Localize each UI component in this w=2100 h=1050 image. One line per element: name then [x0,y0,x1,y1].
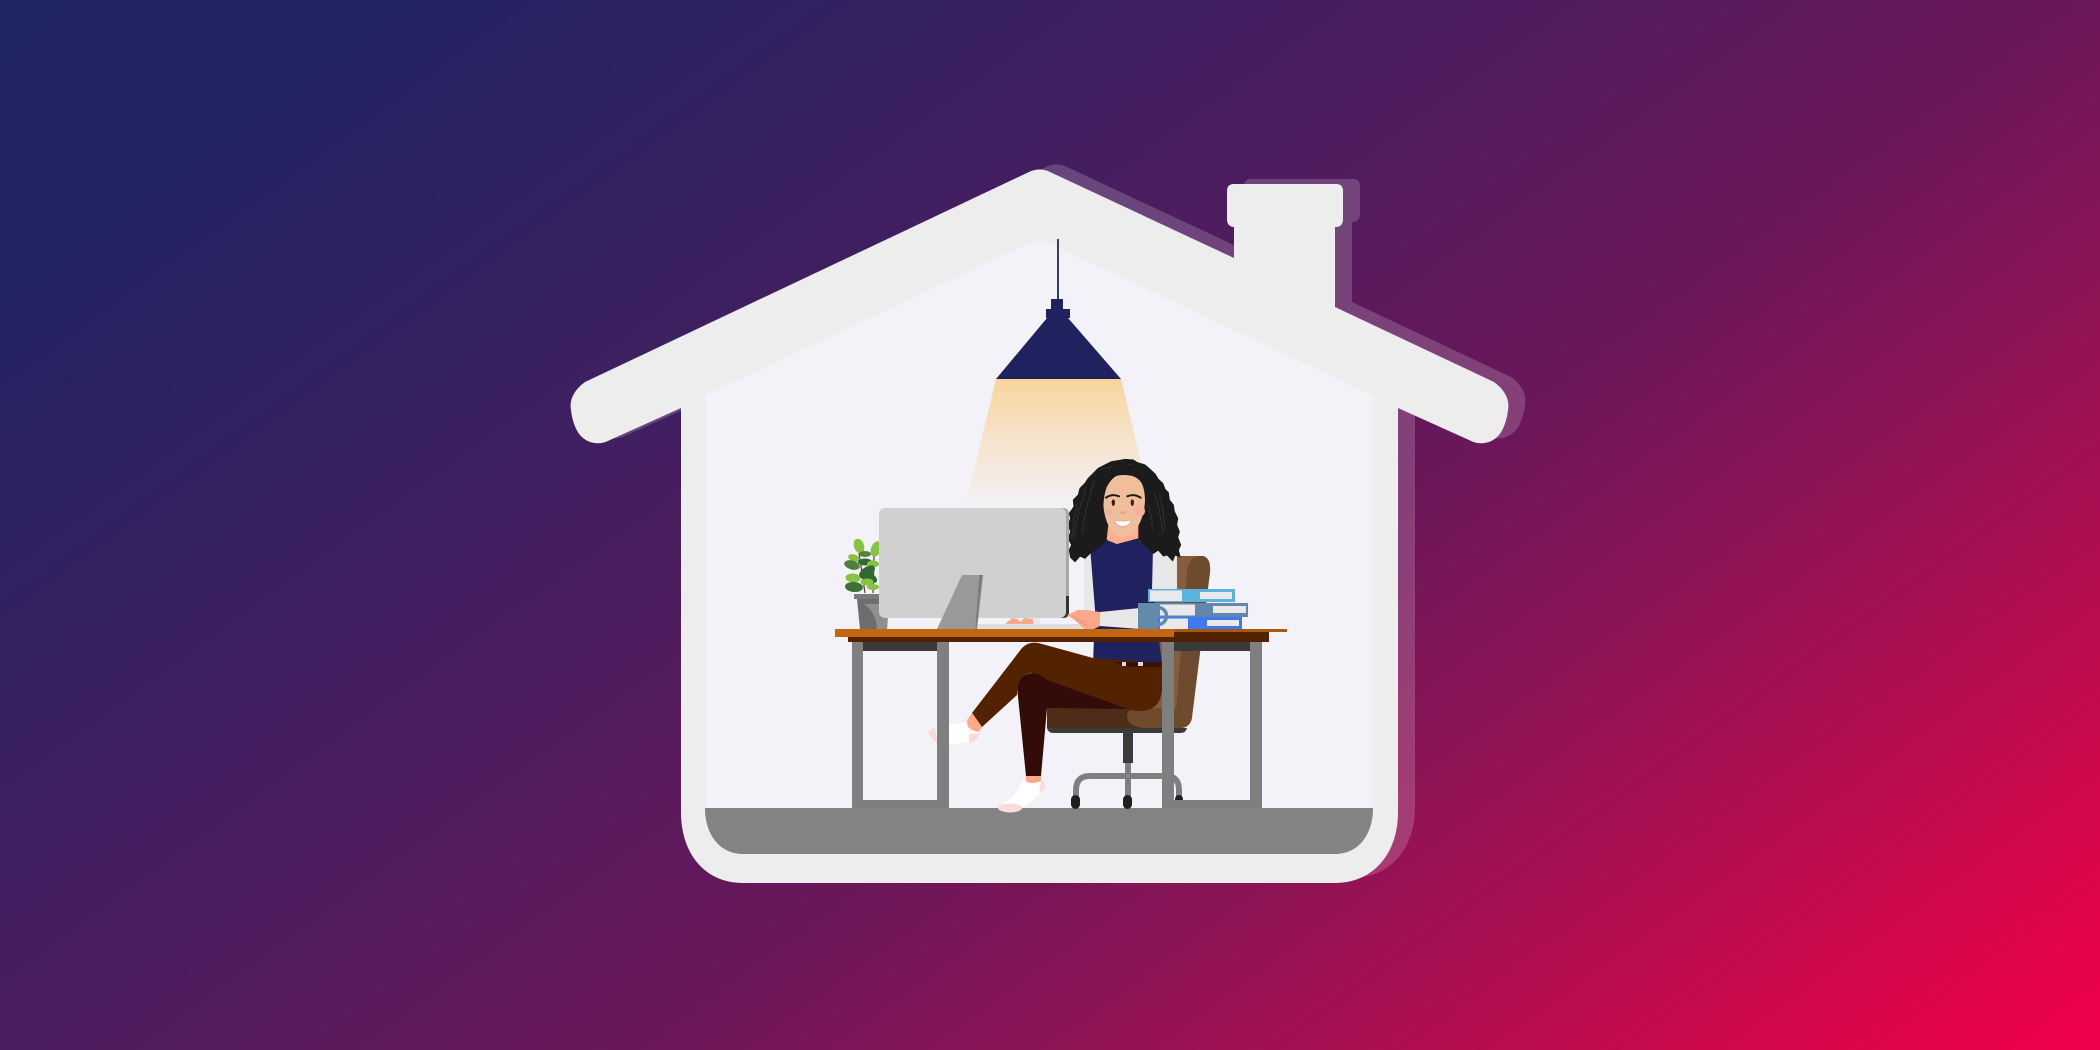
right drawer [1174,642,1250,651]
pot highlight [864,604,889,629]
caster right [1175,795,1183,800]
chair back [1100,556,1210,728]
neck [1107,525,1138,544]
caster left [1071,795,1080,809]
left hand on keyboard [1005,618,1033,624]
office chair [1047,556,1210,809]
caster centre [1123,795,1132,809]
shoulder sleeve [1152,546,1177,590]
eye right [1131,499,1134,506]
upper leg [972,643,1162,727]
heel lower foot [1039,780,1045,793]
mug body [1138,603,1158,629]
computer monitor [879,508,1082,629]
desk under panel [848,637,1269,642]
house frame with roof and chimney [571,170,1508,883]
hair mass [1068,459,1181,562]
face [1103,475,1145,537]
right desk top [1174,629,1287,632]
right arm and hand [1067,608,1140,629]
toe upper foot [928,727,938,744]
eyebrow left [1106,495,1119,498]
monitor screen [879,508,1066,618]
left drawer [863,642,937,651]
sock upper foot [928,722,980,745]
left cuff [1033,618,1040,624]
navy top [1090,538,1162,664]
seat base [1047,728,1187,733]
floor [705,808,1373,854]
monitor dark side [1055,508,1069,618]
pendant lamp [964,239,1153,512]
cheek right [1134,505,1145,517]
monitor dark corner [1060,596,1069,618]
hand [1067,610,1100,629]
gas piston [1123,733,1133,763]
nose [1119,511,1126,514]
cheek left [1105,508,1113,516]
left desk legs [852,642,949,808]
finger lines [1072,616,1088,626]
chair shaft [1125,763,1131,797]
mug [1138,603,1166,629]
room interior wall [706,240,1372,820]
house drop shadow [588,164,1525,878]
top book [1148,589,1235,602]
lamp shade [996,299,1121,379]
pot body [857,599,889,629]
woman working at desk [928,459,1181,812]
chair base arms [1076,776,1179,797]
belt [1112,662,1162,667]
desk [835,629,1287,808]
chair seat [1047,708,1160,728]
right desk panel [1174,632,1269,642]
monitor stand [937,575,979,629]
ankle lower foot [1026,776,1041,783]
back sleeve [1084,548,1094,612]
monitor stand edge [975,575,983,629]
heel upper foot [969,733,980,743]
pot rim [854,594,890,599]
hair fringe [1093,463,1157,507]
lamp cord [1057,239,1059,299]
middle book [1158,603,1248,617]
belt loops [1122,662,1143,666]
chair seat front [1127,708,1192,728]
eyebrow right [1127,495,1141,498]
chair back shade [1176,556,1210,726]
book stack [1148,589,1248,629]
head and hair [1068,459,1181,562]
eye left [1112,499,1115,506]
lower leg [1017,672,1140,776]
sock lower foot [998,780,1045,812]
hair curl texture [1071,464,1165,540]
smile [1114,520,1132,526]
plant stems [859,553,874,593]
mug handle [1150,608,1166,624]
plant leaves [843,537,883,593]
toe lower foot [998,804,1022,812]
ankle upper foot [967,713,982,732]
light beam [964,379,1153,512]
desk top [835,629,1174,637]
bottom book [1158,617,1242,629]
plant in pot [843,537,890,629]
forearm sleeve [1100,608,1140,629]
keyboard [977,624,1082,629]
right desk legs [1162,642,1262,808]
